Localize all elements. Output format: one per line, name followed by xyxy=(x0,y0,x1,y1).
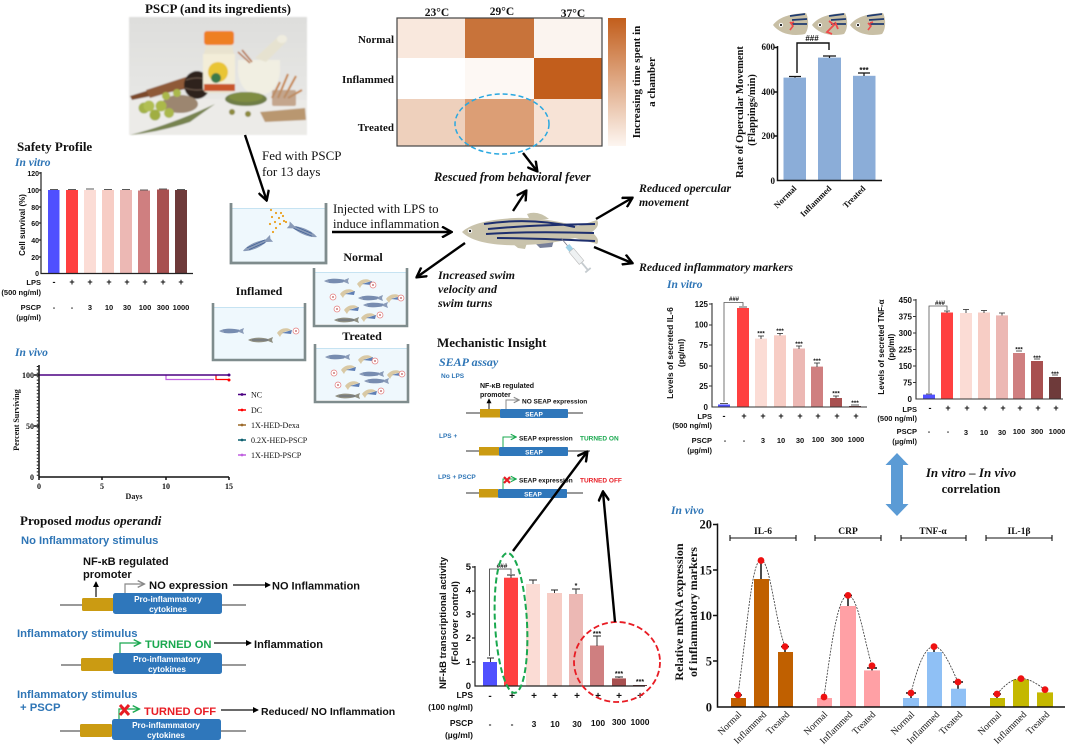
tank: feeding with PSCP xyxy=(231,203,326,263)
diagram: LPS plus PSCP SEAP off: TURNED OFF xyxy=(580,478,622,484)
bar chart: cell survival: 20 xyxy=(31,255,39,262)
bar chart: rate of opercular movement: 200 xyxy=(762,131,776,141)
bar chart: secreted TNF-alpha: LPS xyxy=(902,405,917,414)
bar chart: cell survival: 3 xyxy=(88,303,92,312)
heatmap: time spent per temperature: Increasing time spent in xyxy=(631,26,643,138)
bar chart: NF-kB transcriptional activity: LPS xyxy=(456,690,473,700)
bar chart: NF-kB transcriptional activity: (100 ng/ml) xyxy=(428,702,473,712)
diagram: no LPS SEAP: promoter xyxy=(480,392,511,399)
line chart: percent surviving: Days xyxy=(126,492,142,501)
bar chart: secreted TNF-alpha: *** xyxy=(1051,371,1059,378)
bar chart: rate of opercular movement: ### xyxy=(805,34,819,43)
bar chart: relative mRNA expression: Normal xyxy=(890,710,917,738)
bar chart: cell survival: 1000 xyxy=(173,303,189,312)
bar chart: NF-kB transcriptional activity: 300 xyxy=(612,717,626,727)
bar chart: rate of opercular movement: Rate of Opercular Movement xyxy=(735,46,746,178)
bar chart: relative mRNA expression xyxy=(672,518,1065,747)
bar chart: secreted TNF-alpha: 75 xyxy=(903,378,913,388)
bar chart: NF-kB transcriptional activity: + xyxy=(595,691,601,702)
arrow: injected to fish xyxy=(332,231,451,233)
bar chart: secreted TNF-alpha: 300 xyxy=(1031,427,1043,436)
bar chart: relative mRNA expression: Normal xyxy=(717,710,744,738)
bar chart: relative mRNA expression: 20 xyxy=(700,518,712,532)
bar chart: NF-kB transcriptional activity xyxy=(428,556,650,740)
bar chart: cell survival: - xyxy=(53,303,56,312)
bar chart: relative mRNA expression: Treated xyxy=(765,710,792,737)
bar chart: NF-kB transcriptional activity: + xyxy=(616,691,622,702)
bar chart: cell survival: 100 xyxy=(27,188,39,195)
text: SEAP assay: SEAP assay xyxy=(439,355,499,369)
bar chart: rate of opercular movement: (Flappings/min) xyxy=(747,74,758,146)
text: reduced opercular movement: movement xyxy=(639,195,690,209)
arrow: fed with PSCP xyxy=(245,135,266,200)
text: Fed with PSCP for 13 days: for 13 days xyxy=(262,164,320,179)
bar chart: cell survival: + xyxy=(142,277,148,287)
text: safety profile heading: Safety Profile xyxy=(17,139,92,154)
text: injected with LPS: induce inflammation xyxy=(333,217,440,231)
bar chart: secreted IL-6: + xyxy=(797,411,803,421)
diagram: no inflammatory stimulus: Pro-inflammatory xyxy=(134,595,202,604)
bar chart: cell survival: + xyxy=(87,277,93,287)
bar chart: secreted IL-6: 0 xyxy=(704,403,709,412)
line chart: percent surviving: 1X-HED-Dexa xyxy=(251,421,300,430)
arrow: double-headed in vitro in vivo xyxy=(886,453,908,516)
tank: normal xyxy=(314,250,407,326)
heatmap: time spent per temperature: 37°C xyxy=(561,8,585,20)
bar chart: cell survival: + xyxy=(124,277,130,287)
bar chart: relative mRNA expression: Relative mRNA expression xyxy=(672,543,686,681)
bar chart: NF-kB transcriptional activity: NF-kB transcriptional activity xyxy=(438,556,449,689)
line chart: percent surviving: 10 xyxy=(162,482,170,491)
bar chart: NF-kB transcriptional activity: 0 xyxy=(466,681,471,692)
diagram: inflammatory stimulus: Inflammation xyxy=(254,639,323,651)
bar chart: relative mRNA expression: 10 xyxy=(700,609,712,623)
bar chart: secreted TNF-alpha: 100 xyxy=(1013,427,1025,436)
arrow: red circle to SEAP off xyxy=(603,492,615,622)
bar chart: secreted TNF-alpha: + xyxy=(1035,403,1041,413)
diagram: LPS plus PSCP SEAP off: SEAP expression xyxy=(519,478,573,484)
bar chart: NF-kB transcriptional activity: ### xyxy=(497,563,508,570)
bar chart: NF-kB transcriptional activity: *** xyxy=(593,631,601,638)
bar chart: secreted TNF-alpha: PSCP xyxy=(897,427,917,436)
diagram: LPS plus PSCP SEAP off: SEAP xyxy=(524,492,543,498)
diagram: no LPS SEAP: SEAP xyxy=(525,412,544,418)
line chart: percent surviving: 15 xyxy=(225,482,233,491)
bar chart: secreted IL-6: *** xyxy=(832,390,840,398)
bar chart: relative mRNA expression: 0 xyxy=(706,700,712,714)
bar chart: NF-kB transcriptional activity: + xyxy=(637,691,643,702)
bar chart: secreted IL-6: 30 xyxy=(796,436,804,445)
diagram: inflammatory stimulus xyxy=(17,628,323,674)
bar chart: cell survival: 300 xyxy=(157,303,169,312)
photo: PSCP jar and ingredients xyxy=(129,17,307,135)
bar chart: secreted IL-6: + xyxy=(815,411,821,421)
arrow: fish to opercular xyxy=(596,198,632,219)
text: in vitro in vivo correlation: In vitro – In vivo xyxy=(925,465,1017,480)
bar chart: relative mRNA expression: Inflammed xyxy=(992,709,1029,747)
bar chart: secreted IL-6: + xyxy=(760,411,766,421)
bar chart: NF-kB transcriptional activity: - xyxy=(511,719,514,729)
bar chart: secreted IL-6: 1000 xyxy=(848,435,864,444)
bar chart: secreted TNF-alpha: 375 xyxy=(899,312,913,322)
heading: proposed modus operandi: Proposed modus operandi xyxy=(20,513,162,528)
callout: red dashed circle xyxy=(574,622,660,702)
diagram: no LPS SEAP: NO SEAP expression xyxy=(522,398,587,406)
bar chart: cell survival: - xyxy=(52,277,56,287)
heatmap: time spent per temperature xyxy=(342,6,658,146)
bar chart: secreted IL-6: 25 xyxy=(699,382,709,391)
line chart: percent surviving: 0 xyxy=(37,482,41,491)
bar chart: relative mRNA expression: TNF-α xyxy=(919,527,947,537)
bar chart: secreted TNF-alpha: - xyxy=(947,427,950,436)
heatmap: time spent per temperature: 23°C xyxy=(425,7,449,19)
text: in vitro label: In vitro xyxy=(14,157,51,169)
bar chart: NF-kB transcriptional activity: 3 xyxy=(532,719,537,729)
bar chart: relative mRNA expression: CRP xyxy=(838,527,858,537)
diagram: LPS plus PSCP SEAP off xyxy=(438,474,622,498)
text: in vitro markers label: In vitro xyxy=(666,279,703,291)
bar chart: secreted TNF-alpha: + xyxy=(945,403,951,413)
bar chart: NF-kB transcriptional activity: PSCP xyxy=(450,718,473,728)
bar chart: secreted TNF-alpha: (µg/ml) xyxy=(892,437,918,446)
bar chart: secreted IL-6: (500 ng/ml) xyxy=(672,421,712,430)
bar chart: secreted TNF-alpha: (pg/ml) xyxy=(887,333,896,360)
line chart: percent surviving: DC xyxy=(251,406,262,415)
bar chart: NF-kB transcriptional activity: + xyxy=(574,691,580,702)
bar chart: NF-kB transcriptional activity: (µg/ml) xyxy=(445,730,473,740)
bar chart: secreted IL-6: 125 xyxy=(695,300,709,309)
bar chart: NF-kB transcriptional activity: 3 xyxy=(466,610,471,620)
bar chart: secreted TNF-alpha: 0 xyxy=(908,395,913,404)
bar chart: NF-kB transcriptional activity: *** xyxy=(615,671,623,678)
bar chart: NF-kB transcriptional activity: 1000 xyxy=(631,717,650,727)
arrow: fish to swim xyxy=(417,243,465,277)
bar chart: cell survival: 30 xyxy=(123,303,131,312)
heatmap: time spent per temperature: Inflammed xyxy=(342,74,394,86)
bar chart: cell survival: PSCP xyxy=(21,303,41,312)
arrow: fish to rescued xyxy=(513,191,526,211)
text: increased swim velocity: Increased swim xyxy=(437,268,515,282)
bar chart: NF-kB transcriptional activity: 4 xyxy=(466,586,472,596)
bar chart: cell survival: 100 xyxy=(139,303,151,312)
bar chart: relative mRNA expression: 5 xyxy=(706,654,712,668)
diagram: no inflammatory stimulus: No Inflammatory stimulus xyxy=(21,535,158,547)
heading: mechanistic insight: Mechanistic Insight xyxy=(437,335,547,350)
bar chart: secreted TNF-alpha: 450 xyxy=(899,296,913,305)
bar chart: secreted IL-6: 100 xyxy=(812,435,824,444)
bar chart: NF-kB transcriptional activity: 10 xyxy=(550,719,560,729)
bar chart: secreted TNF-alpha: + xyxy=(982,403,988,413)
bar chart: secreted TNF-alpha: - xyxy=(928,427,931,436)
bar chart: NF-kB transcriptional activity: + xyxy=(531,691,537,702)
diagram: inflammatory stimulus: cytokines xyxy=(148,665,186,674)
bar chart: NF-kB transcriptional activity: + xyxy=(552,691,558,702)
bar chart: secreted TNF-alpha: 150 xyxy=(899,362,913,371)
diagram: no inflammatory stimulus: NO Inflammation xyxy=(272,580,360,592)
bar chart: NF-kB transcriptional activity: 5 xyxy=(466,562,472,573)
line chart: percent surviving: 0 xyxy=(30,473,34,482)
bar chart: relative mRNA expression: Treated xyxy=(938,710,965,737)
diagram: LPS SEAP on: LPS + xyxy=(439,433,457,440)
bar chart: cell survival: - xyxy=(71,303,74,312)
bar chart: NF-kB transcriptional activity: - xyxy=(489,719,492,729)
diagram: inflammatory stimulus plus PSCP: Reduced/ NO Inflammation xyxy=(261,706,395,718)
bar chart: secreted IL-6: PSCP xyxy=(692,436,712,445)
bar chart: secreted TNF-alpha: (500 ng/ml) xyxy=(877,414,917,423)
bar chart: relative mRNA expression: Inflammed xyxy=(732,709,769,747)
bar chart: NF-kB transcriptional activity: (Fold over control) xyxy=(450,581,461,665)
bar chart: cell survival xyxy=(1,171,193,322)
bar chart: secreted IL-6: 3 xyxy=(761,436,765,445)
bar chart: secreted IL-6: ### xyxy=(729,297,740,303)
bar chart: secreted TNF-alpha: 30 xyxy=(998,428,1006,437)
bar chart: relative mRNA expression: Inflammed xyxy=(818,709,855,747)
bar chart: rate of opercular movement: 0 xyxy=(770,176,776,186)
bar chart: secreted IL-6: + xyxy=(741,411,747,421)
diagram: inflammatory stimulus plus PSCP: TURNED OFF xyxy=(144,706,216,718)
bar chart: cell survival: 80 xyxy=(31,205,39,212)
bar chart: secreted TNF-alpha: + xyxy=(1053,403,1059,413)
diagram: no inflammatory stimulus xyxy=(21,535,360,614)
heatmap: time spent per temperature: Normal xyxy=(358,34,394,46)
line chart: percent surviving: 50 xyxy=(26,422,34,431)
bar chart: secreted TNF-alpha: + xyxy=(1017,403,1023,413)
bar chart: NF-kB transcriptional activity: + xyxy=(509,691,515,702)
bar chart: relative mRNA expression: Treated xyxy=(851,710,878,737)
bar chart: relative mRNA expression: IL-6 xyxy=(754,527,772,537)
line chart: percent surviving: 5 xyxy=(100,482,104,491)
bar chart: cell survival: + xyxy=(160,277,166,287)
line chart: percent surviving: 1X-HED-PSCP xyxy=(251,451,302,460)
diagram: inflammatory stimulus: TURNED ON xyxy=(145,639,212,651)
bar chart: secreted IL-6: *** xyxy=(776,328,784,335)
diagram: LPS SEAP on: SEAP expression xyxy=(519,436,573,442)
title: PSCP and its ingredients: PSCP (and its ingredients) xyxy=(145,1,291,16)
bar chart: cell survival: (µg/ml) xyxy=(16,313,42,322)
text: in vivo label: In vivo xyxy=(14,347,48,359)
bar chart: secreted IL-6: 75 xyxy=(699,341,709,350)
bar chart: relative mRNA expression: Treated xyxy=(1025,710,1052,737)
icon: zebrafish xyxy=(462,213,598,249)
diagram: LPS plus PSCP SEAP off: LPS + PSCP xyxy=(438,474,476,481)
bar chart: rate of opercular movement: Inflammed xyxy=(798,183,834,219)
bar chart: secreted TNF-alpha xyxy=(877,296,1065,446)
diagram: LPS SEAP on: TURNED ON xyxy=(580,436,619,442)
tank: inflamed xyxy=(213,284,305,360)
bar chart: secreted IL-6 xyxy=(665,297,867,455)
diagram: inflammatory stimulus: Pro-inflammatory xyxy=(133,655,201,664)
heatmap: time spent per temperature: 29°C xyxy=(490,6,514,18)
diagram: inflammatory stimulus plus PSCP: + PSCP xyxy=(20,702,61,714)
tank: treated: Treated xyxy=(342,329,382,343)
tank: inflamed: Inflamed xyxy=(236,284,283,298)
callout: green dashed ellipse xyxy=(491,552,531,694)
bar chart: secreted TNF-alpha: Levels of secreted TNF-α xyxy=(877,299,886,395)
bar chart: rate of opercular movement: Normal xyxy=(772,183,799,210)
bar chart: secreted IL-6: 300 xyxy=(831,435,843,444)
bar chart: NF-kB transcriptional activity: *** xyxy=(636,679,644,686)
bar chart: secreted IL-6: - xyxy=(743,436,746,445)
bar chart: relative mRNA expression: 15 xyxy=(700,564,712,578)
arrow: green ellipse to SEAP on xyxy=(513,452,587,551)
bar chart: NF-kB transcriptional activity: * xyxy=(575,583,578,590)
diagram: LPS SEAP on: SEAP xyxy=(525,450,544,456)
bar chart: secreted IL-6: LPS xyxy=(697,412,712,421)
bar chart: NF-kB transcriptional activity: 1 xyxy=(466,657,472,668)
bar chart: cell survival: 40 xyxy=(31,238,39,245)
bar chart: rate of opercular movement xyxy=(735,34,882,219)
bar chart: secreted TNF-alpha: *** xyxy=(1033,355,1041,362)
diagram: no LPS SEAP xyxy=(441,373,587,418)
tank: normal: Normal xyxy=(343,250,383,264)
bar chart: cell survival: Cell survival (%) xyxy=(18,194,27,256)
diagram: inflammatory stimulus plus PSCP xyxy=(17,689,395,740)
line chart: percent surviving: Percent Surviving xyxy=(12,389,21,451)
diagram: inflammatory stimulus plus PSCP: Pro-inflammatory xyxy=(132,721,200,730)
text: in vitro in vivo correlation: correlation xyxy=(942,482,1000,496)
tank: treated xyxy=(315,329,408,402)
bar chart: secreted TNF-alpha: + xyxy=(964,403,970,413)
diagram: inflammatory stimulus: Inflammatory stimulus xyxy=(17,628,138,640)
bar chart: secreted IL-6: 50 xyxy=(699,362,709,371)
bar chart: secreted IL-6: *** xyxy=(757,330,765,338)
bar chart: cell survival: + xyxy=(69,277,75,287)
bar chart: cell survival: LPS xyxy=(26,278,41,287)
bar chart: secreted TNF-alpha: *** xyxy=(1015,346,1023,354)
bar chart: cell survival: 0 xyxy=(35,271,39,278)
heatmap: time spent per temperature: a chamber xyxy=(646,57,658,107)
line chart: percent surviving: 0.2X-HED-PSCP xyxy=(251,436,308,445)
bar chart: secreted IL-6: *** xyxy=(813,358,821,365)
text: reduced opercular movement: Reduced opercular xyxy=(638,181,731,195)
bar chart: rate of opercular movement: *** xyxy=(859,66,870,75)
bar chart: relative mRNA expression: IL-1β xyxy=(1008,527,1030,537)
diagram: no inflammatory stimulus: NO expression xyxy=(149,580,228,592)
bar chart: rate of opercular movement: 600 xyxy=(762,42,776,52)
bar chart: secreted TNF-alpha: 10 xyxy=(980,428,988,437)
diagram: no inflammatory stimulus: cytokines xyxy=(149,605,187,614)
bar chart: secreted IL-6: - xyxy=(722,411,726,421)
callout: dashed circle on treated 29C xyxy=(455,94,549,154)
text: Fed with PSCP for 13 days: Fed with PSCP xyxy=(262,148,341,163)
bar chart: secreted IL-6: - xyxy=(724,436,727,445)
bar chart: secreted IL-6: 100 xyxy=(695,320,709,330)
text: reduced inflammatory markers: Reduced inflammatory markers xyxy=(638,260,793,274)
diagram: no LPS SEAP: NF-κB regulated xyxy=(480,383,534,390)
bar chart: NF-kB transcriptional activity: 100 xyxy=(591,718,605,728)
bar chart: secreted IL-6: 10 xyxy=(777,436,785,445)
bar chart: relative mRNA expression: Normal xyxy=(803,710,830,738)
diagram: LPS SEAP on xyxy=(439,433,619,456)
text: increased swim velocity: swim turns xyxy=(437,296,493,310)
bar chart: NF-kB transcriptional activity: - xyxy=(488,691,492,702)
bar chart: rate of opercular movement: 400 xyxy=(762,87,776,97)
bar chart: secreted TNF-alpha: 1000 xyxy=(1049,427,1065,436)
text: in vitro in vivo correlation xyxy=(925,465,1017,496)
arrow: to rescued label xyxy=(523,153,537,171)
bar chart: cell survival: + xyxy=(106,277,112,287)
bar chart: cell survival: (500 ng/ml) xyxy=(1,288,41,297)
diagram: inflammatory stimulus plus PSCP: cytokines xyxy=(147,731,185,740)
bar chart: secreted IL-6: *** xyxy=(795,341,803,348)
bar chart: relative mRNA expression: of inflammatory markers xyxy=(686,547,700,677)
diagram: no inflammatory stimulus: promoter xyxy=(83,569,132,581)
bar chart: secreted IL-6: + xyxy=(853,411,859,421)
diagram: no LPS SEAP: No LPS xyxy=(441,373,465,380)
bar chart: NF-kB transcriptional activity: 30 xyxy=(572,719,582,729)
bar chart: secreted TNF-alpha: ### xyxy=(935,301,946,307)
bar chart: secreted IL-6: *** xyxy=(851,400,859,407)
bar chart: cell survival: 60 xyxy=(31,221,39,228)
bar chart: secreted TNF-alpha: 3 xyxy=(964,428,968,437)
bar chart: cell survival: 10 xyxy=(105,303,113,312)
line chart: percent surviving: NC xyxy=(251,390,262,400)
diagram: inflammatory stimulus plus PSCP: Inflammatory stimulus xyxy=(17,689,138,701)
bar chart: secreted IL-6: (µg/ml) xyxy=(687,446,713,455)
text: injected with LPS: Injected with LPS to xyxy=(333,202,439,216)
bar chart: secreted TNF-alpha: 225 xyxy=(899,346,913,354)
text: in vivo markers label: In vivo xyxy=(670,505,704,517)
opercular movement fish heads xyxy=(773,13,885,35)
bar chart: secreted TNF-alpha: 300 xyxy=(899,329,913,338)
text: increased swim velocity: velocity and xyxy=(438,282,498,296)
bar chart: cell survival: + xyxy=(178,277,184,287)
bar chart: secreted TNF-alpha: + xyxy=(1000,403,1006,413)
bar chart: secreted TNF-alpha: - xyxy=(928,403,932,413)
arrow: fish to markers xyxy=(594,247,632,263)
icon: syringe xyxy=(558,236,591,272)
bar chart: rate of opercular movement: Treated xyxy=(841,183,868,210)
bar chart: relative mRNA expression: Inflammed xyxy=(905,709,942,747)
diagram: no inflammatory stimulus: NF-κB regulated xyxy=(83,556,169,568)
bar chart: secreted IL-6: + xyxy=(834,411,840,421)
bar chart: cell survival: 120 xyxy=(27,171,39,178)
line chart: percent surviving: 100 xyxy=(22,371,34,380)
bar chart: secreted IL-6: Levels of secreted IL-6 xyxy=(665,307,675,399)
heatmap: time spent per temperature: Treated xyxy=(358,122,394,134)
bar chart: relative mRNA expression: Normal xyxy=(977,710,1004,738)
line chart: percent surviving xyxy=(12,365,308,501)
text: rescued from behavioral fever: Rescued from behavioral fever xyxy=(433,170,591,184)
bar chart: secreted IL-6: + xyxy=(778,411,784,421)
bar chart: NF-kB transcriptional activity: 2 xyxy=(466,633,471,644)
bar chart: secreted IL-6: (pg/ml) xyxy=(676,339,686,367)
